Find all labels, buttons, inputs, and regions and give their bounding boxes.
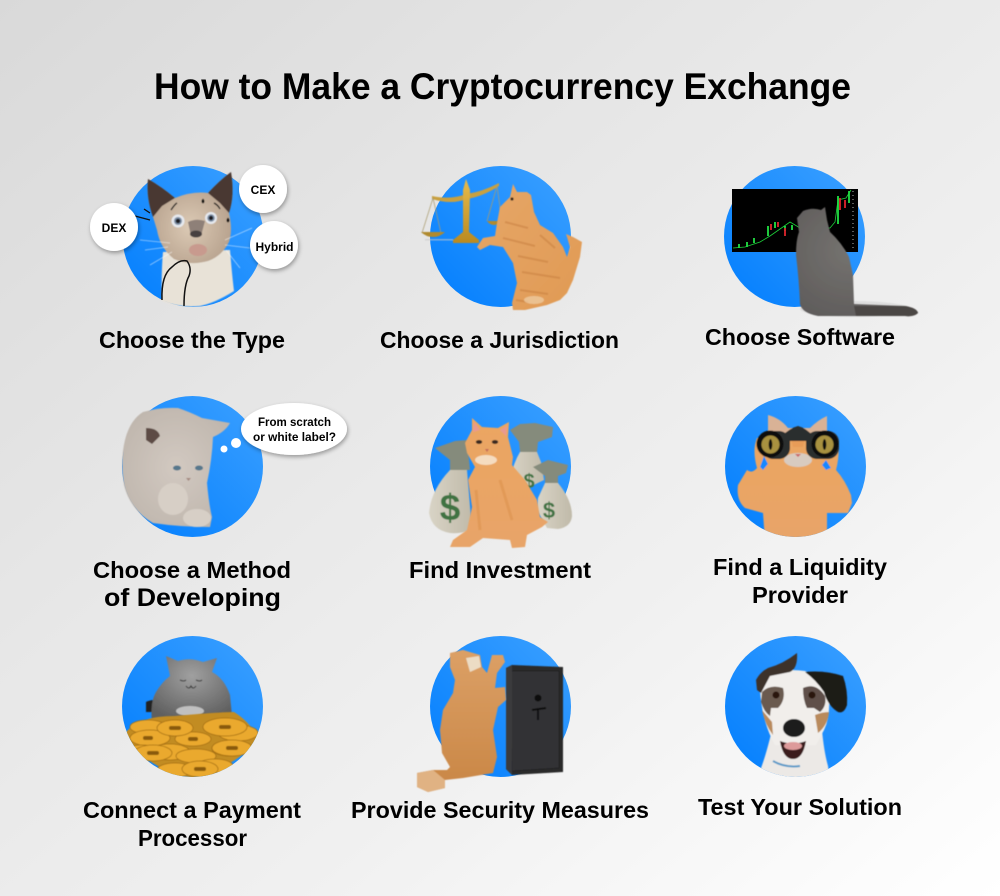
blue circle 2 bbox=[430, 166, 571, 307]
blue circle 5 bbox=[430, 396, 571, 537]
icon: golden scales bbox=[421, 179, 503, 243]
step 1: choose the type bbox=[90, 165, 298, 307]
label: connect a payment processor bbox=[83, 797, 301, 851]
label: connect a payment processor: Connect a Payment bbox=[83, 797, 301, 823]
bubble: Hybrid bbox=[250, 221, 298, 269]
icon: orange cat with binoculars bbox=[738, 415, 852, 540]
step 8: provide security measures bbox=[417, 636, 571, 792]
icon: money bags: $ bbox=[523, 471, 535, 493]
label: choose software: Choose Software bbox=[705, 324, 895, 350]
label: choose a method of developing: of Developing bbox=[104, 584, 281, 612]
label: find a liquidity provider: Find a Liquidity bbox=[713, 554, 887, 580]
label: choose a method of developing: Choose a Method bbox=[93, 557, 291, 583]
icon: bitcoin coin pile bbox=[124, 712, 258, 778]
icon: thinking cream kitten bbox=[122, 408, 230, 527]
step 7: connect a payment processor bbox=[122, 636, 263, 778]
blue circle 9 bbox=[725, 636, 866, 777]
label: choose the type: Choose the Type bbox=[99, 327, 285, 353]
label: test your solution: Test Your Solution bbox=[698, 794, 902, 820]
icon: grey cat from behind bbox=[796, 207, 918, 317]
speech bubble: method question: or white label? bbox=[253, 432, 336, 444]
bubble: Hybrid: Hybrid bbox=[255, 240, 294, 254]
icon: money bags bbox=[429, 423, 572, 533]
bubble: DEX: DEX bbox=[102, 221, 126, 235]
title: How to Make a Cryptocurrency Exchange bbox=[154, 66, 851, 107]
label: find a liquidity provider bbox=[713, 554, 887, 608]
blue circle 8 bbox=[430, 636, 571, 777]
step 3: choose software bbox=[724, 166, 918, 317]
blue circle 3 bbox=[724, 166, 865, 307]
bubble: CEX: CEX bbox=[251, 183, 275, 197]
label: provide security measures: Provide Security Measures bbox=[351, 797, 649, 823]
label: connect a payment processor: Processor bbox=[138, 825, 247, 851]
step 5: find investment bbox=[429, 396, 572, 548]
blue circle 4 bbox=[122, 396, 263, 537]
bubble: DEX bbox=[90, 203, 138, 251]
icon: money bags: $ bbox=[543, 498, 555, 523]
step 9: test your solution bbox=[725, 636, 866, 780]
label: find a liquidity provider: Provider bbox=[752, 582, 848, 608]
blue circle 6 bbox=[725, 396, 866, 537]
label: find investment: Find Investment bbox=[409, 557, 591, 583]
label: choose a method of developing bbox=[93, 557, 291, 612]
chart: candlestick screen bbox=[732, 189, 858, 252]
label: choose a jurisdiction: Choose a Jurisdiction bbox=[380, 327, 619, 353]
speech bubble: method question: From scratch bbox=[258, 417, 331, 429]
bubble: CEX bbox=[239, 165, 287, 213]
speech bubble: method question bbox=[241, 403, 347, 455]
blue circle 7 bbox=[122, 636, 263, 777]
icon: money bags: $ bbox=[440, 487, 461, 528]
icon: drawn paw bbox=[162, 261, 190, 306]
icon: orange cat reaching bbox=[477, 184, 582, 310]
blue circle 1 bbox=[122, 166, 264, 307]
icon: black safe bbox=[506, 665, 563, 775]
step 6: find a liquidity provider bbox=[725, 396, 866, 540]
icon: grey cat sleeping bbox=[146, 656, 232, 722]
step 2: choose a jurisdiction bbox=[421, 166, 582, 310]
step 4: choose a method of developing bbox=[122, 396, 347, 537]
icon: orange cat climbing safe bbox=[417, 650, 506, 792]
thought dots bbox=[220, 438, 241, 452]
surprise marks bbox=[135, 209, 150, 220]
icon: surprised siamese cat bbox=[140, 172, 252, 306]
icon: happy dog bbox=[756, 653, 847, 780]
icon: orange cat sitting bbox=[450, 418, 548, 548]
